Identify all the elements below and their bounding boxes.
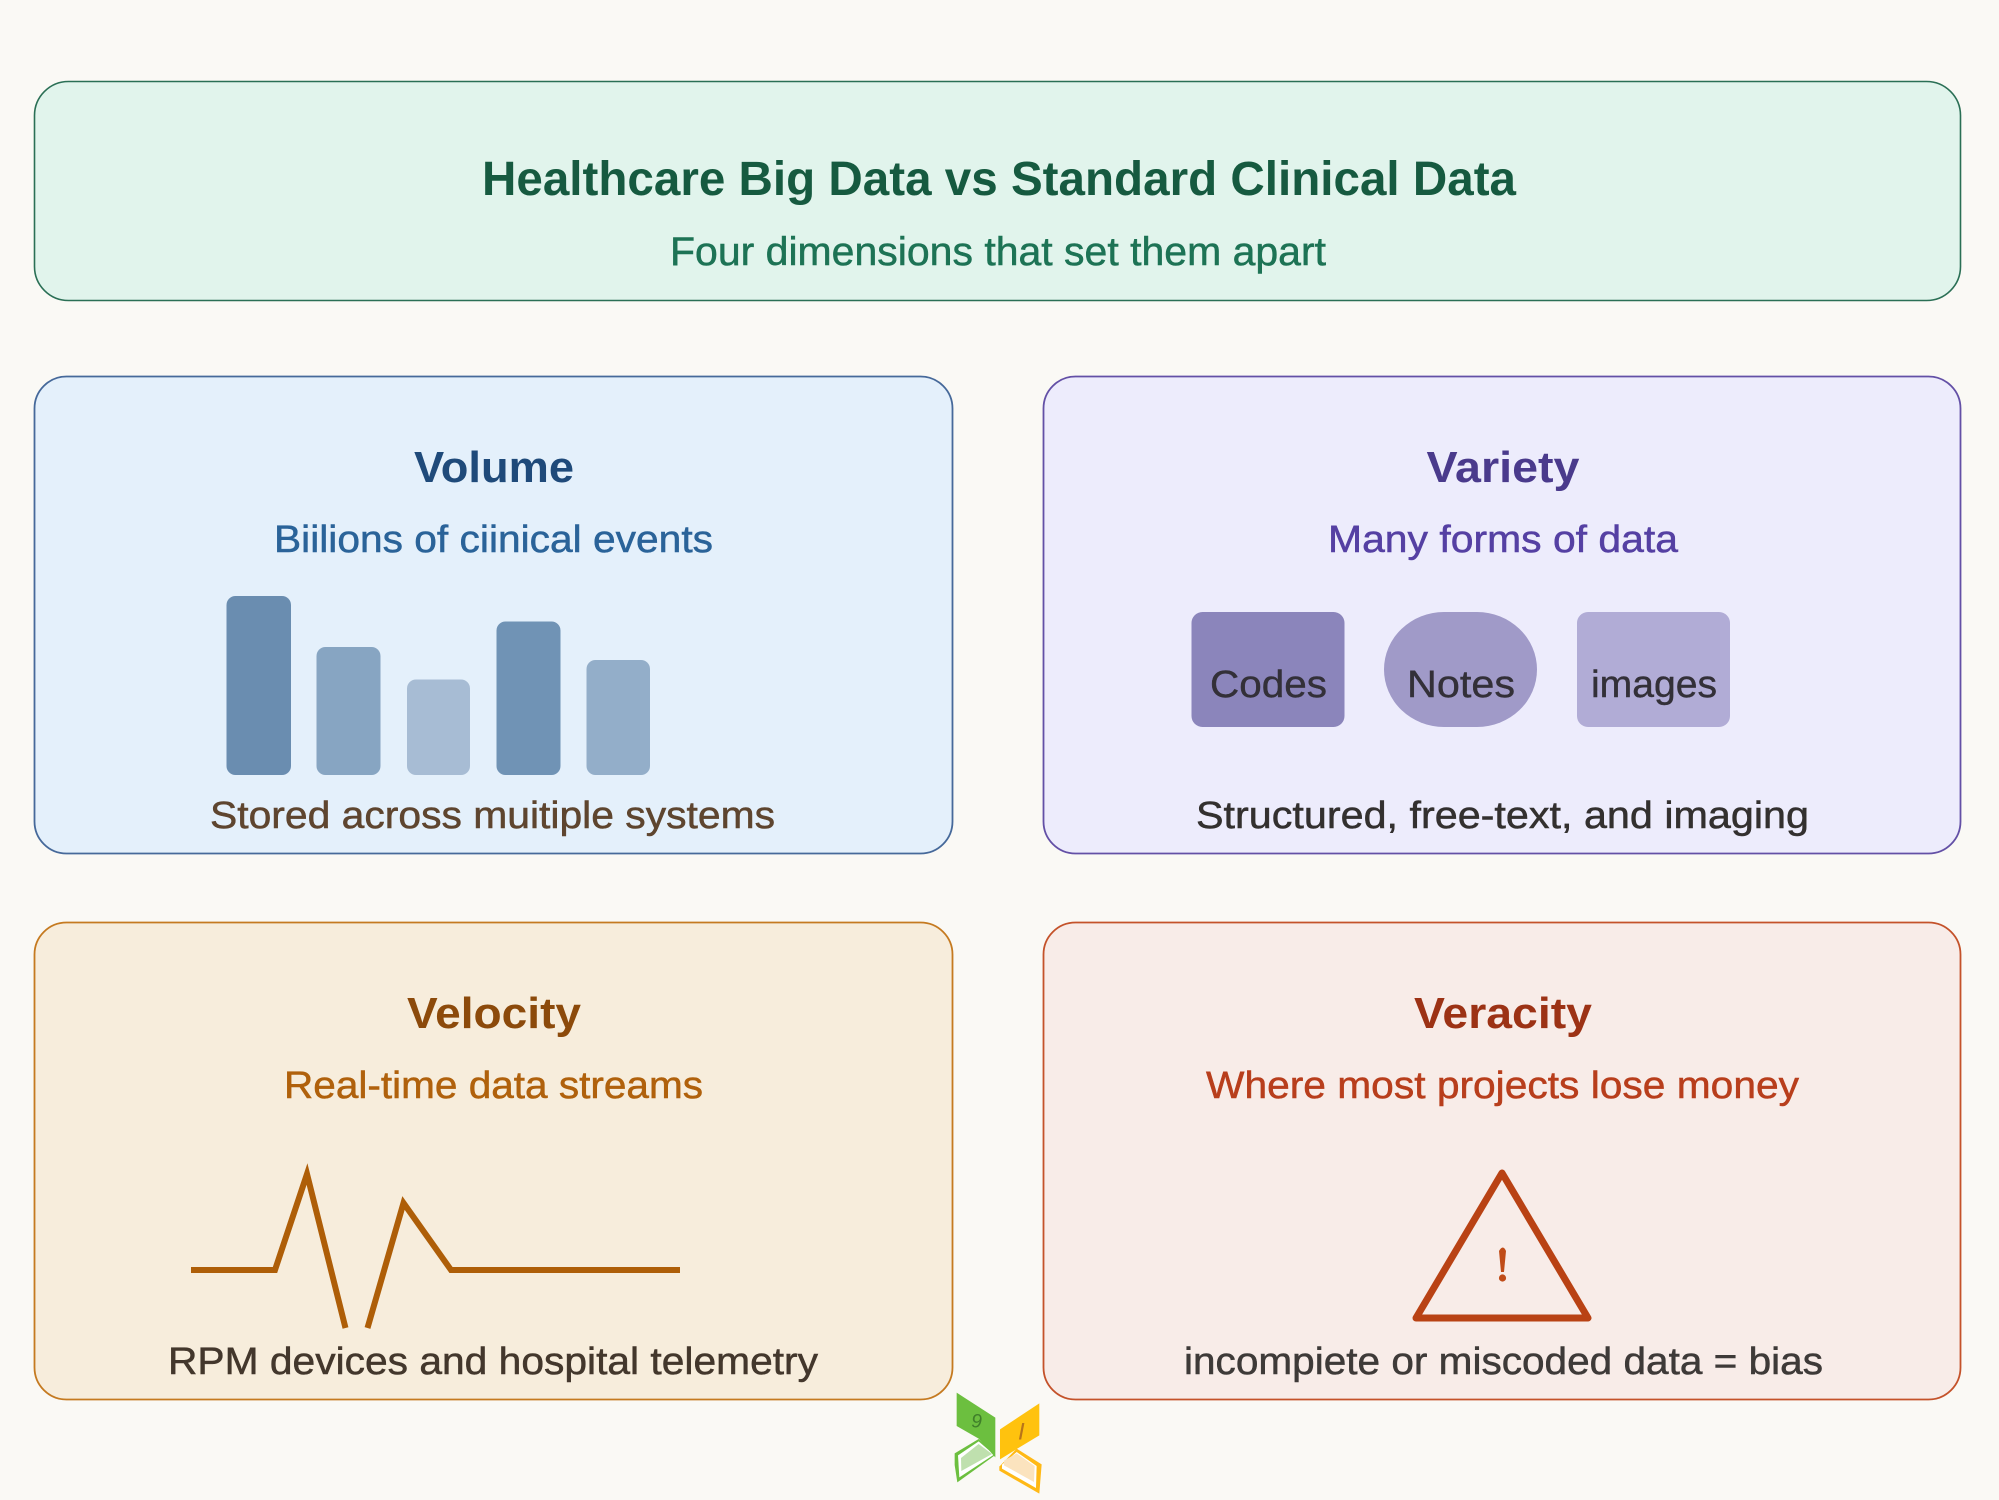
logo: green book xyxy=(955,1439,995,1482)
caption: variety: Structured, free-text, and imaging xyxy=(1196,795,1809,837)
panel: velocity xyxy=(34,922,952,1400)
subheading: volume: Biilions of ciinical events xyxy=(274,519,713,561)
logo: yellow flag: I xyxy=(1018,1418,1025,1445)
box: notes xyxy=(1384,612,1537,727)
heading: veracity: Veracity xyxy=(1414,989,1593,1038)
box: codes: Codes xyxy=(1210,664,1327,706)
panel: veracity xyxy=(1044,922,1960,1400)
box: images: images xyxy=(1591,664,1717,706)
data forms xyxy=(1192,612,1730,727)
subheading: variety: Many forms of data xyxy=(1328,519,1679,561)
panel: variety xyxy=(1044,376,1960,854)
bar chart xyxy=(226,596,650,775)
subheading: veracity: Where most projects lose money xyxy=(1206,1065,1799,1107)
exclamation mark xyxy=(1499,1248,1506,1282)
caption: veracity: incompiete or miscoded data = bias xyxy=(1184,1341,1823,1383)
header panel xyxy=(34,82,1960,300)
heading: velocity: Velocity xyxy=(407,989,582,1038)
icon: heartbeat line xyxy=(191,1174,680,1328)
logo: yellow book xyxy=(999,1449,1042,1494)
caption: volume: Stored across muitiple systems xyxy=(210,795,775,837)
box: codes xyxy=(1192,612,1344,727)
subtitle: Four dimensions that set them apart xyxy=(670,230,1326,274)
heading: volume: Volume xyxy=(414,443,574,492)
caption: velocity: RPM devices and hospital telemetry xyxy=(168,1341,818,1383)
box: notes: Notes xyxy=(1407,664,1515,706)
heading: variety: Variety xyxy=(1426,443,1580,492)
panel: volume xyxy=(34,376,952,854)
subheading: velocity: Real-time data streams xyxy=(284,1065,703,1107)
logo: green flag: 9 xyxy=(971,1411,982,1432)
title: Healthcare Big Data vs Standard Clinical Data xyxy=(482,153,1516,206)
logo xyxy=(955,1393,1042,1494)
box: images xyxy=(1577,612,1730,727)
icon: warning triangle xyxy=(1416,1173,1588,1318)
